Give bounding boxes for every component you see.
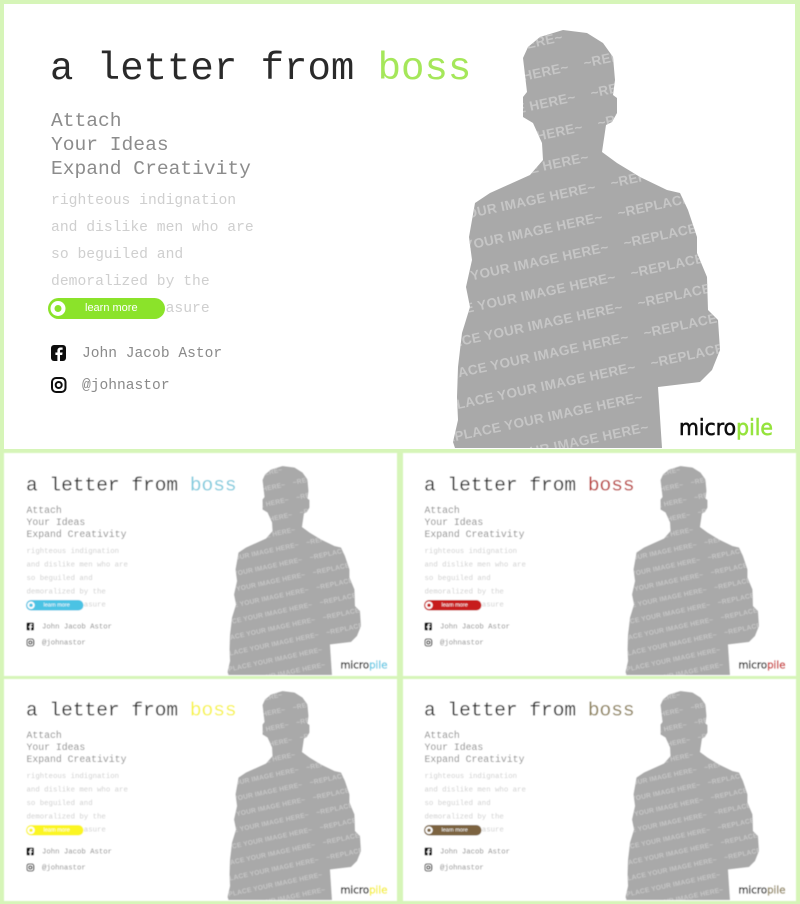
body text: demoralized by the — [424, 588, 504, 596]
button: learn more: learn more — [44, 828, 70, 834]
image placeholder silhouette: ~REPLACE YOUR IMAGE HERE~ — [309, 532, 418, 562]
body text: so beguiled and — [51, 247, 183, 263]
body text: righteous indignation — [424, 773, 517, 781]
image placeholder silhouette: ~REPLACE YOUR IMAGE HERE~ — [366, 119, 584, 180]
title: a letter from boss — [26, 474, 237, 496]
icon: facebook — [424, 622, 432, 630]
image placeholder silhouette: ~REPLACE YOUR IMAGE HERE~ — [585, 527, 694, 556]
subtitle: Your Ideas — [26, 517, 85, 528]
image placeholder silhouette: ~REPLACE YOUR IMAGE HERE~ — [609, 632, 718, 661]
button: learn more — [26, 825, 84, 836]
contact name: John Jacob Astor — [42, 848, 112, 856]
image placeholder silhouette: ~REPLACE YOUR IMAGE HERE~ — [319, 802, 428, 832]
image placeholder silhouette: ~REPLACE YOUR IMAGE HERE~ — [191, 767, 300, 796]
contact handle: @johnastor — [440, 640, 484, 648]
icon: facebook — [51, 345, 66, 361]
logo: micropile — [340, 658, 388, 672]
image placeholder silhouette: ~REPLACE YOUR IMAGE HERE~ — [619, 677, 728, 706]
image placeholder silhouette: ~REPLACE YOUR IMAGE HERE~ — [187, 752, 296, 781]
body text: and dislike men who are — [51, 220, 254, 236]
contact handle: @johnastor — [42, 640, 86, 648]
logo: micropile — [738, 884, 786, 896]
image placeholder silhouette: ~REPLACE YOUR IMAGE HERE~ — [694, 697, 800, 727]
image placeholder silhouette: ~REPLACE YOUR IMAGE HERE~ — [302, 727, 411, 757]
body text: so beguiled and — [26, 575, 93, 583]
image placeholder silhouette: ~REPLACE YOUR IMAGE HERE~ — [352, 59, 570, 120]
image placeholder silhouette: ~REPLACE YOUR IMAGE HERE~ — [181, 497, 290, 526]
image placeholder silhouette: ~REPLACE YOUR IMAGE HERE~ — [589, 767, 698, 796]
body text: demoralized by the — [26, 588, 106, 596]
icon: facebook — [424, 848, 432, 856]
subtitle: Expand Creativity — [424, 754, 525, 765]
image placeholder silhouette: ~REPLACE YOUR IMAGE HERE~ — [592, 557, 701, 586]
image placeholder silhouette: ~REPLACE YOUR IMAGE HERE~ — [346, 29, 564, 90]
image placeholder silhouette: ~REPLACE YOUR IMAGE HERE~ — [187, 527, 296, 556]
image placeholder silhouette: ~REPLACE YOUR IMAGE HERE~ — [439, 449, 657, 510]
body text: righteous indignation — [26, 773, 119, 781]
body text: charms of pleasure — [26, 826, 106, 834]
image placeholder silhouette: ~REPLACE YOUR IMAGE HERE~ — [299, 712, 408, 742]
image placeholder silhouette — [227, 466, 362, 676]
image placeholder silhouette: ~REPLACE YOUR IMAGE HERE~ — [386, 209, 604, 270]
image placeholder silhouette: ~REPLACE YOUR IMAGE HERE~ — [211, 857, 320, 886]
image placeholder silhouette — [453, 30, 720, 448]
image placeholder silhouette: ~REPLACE YOUR IMAGE HERE~ — [582, 10, 800, 71]
button: learn more: learn more — [442, 602, 468, 608]
image placeholder silhouette: ~REPLACE YOUR IMAGE HERE~ — [589, 542, 698, 571]
panel: brown slide — [403, 679, 800, 904]
image placeholder silhouette: ~REPLACE YOUR IMAGE HERE~ — [197, 572, 306, 601]
image placeholder silhouette: ~REPLACE YOUR IMAGE HERE~ — [177, 482, 286, 511]
subtitle: Attach — [26, 505, 62, 516]
image placeholder silhouette: ~REPLACE YOUR IMAGE HERE~ — [690, 682, 799, 712]
image placeholder silhouette: ~REPLACE YOUR IMAGE HERE~ — [582, 512, 691, 541]
image placeholder silhouette: ~REPLACE YOUR IMAGE HERE~ — [406, 299, 624, 360]
subtitle: Expand Creativity — [26, 754, 127, 765]
image placeholder silhouette: ~REPLACE YOUR IMAGE HERE~ — [399, 269, 617, 330]
body text: so beguiled and — [424, 575, 491, 583]
body text: charms of pleasure — [424, 826, 504, 834]
body text: and dislike men who are — [26, 786, 128, 794]
panel: red slide — [402, 452, 796, 676]
icon: instagram — [27, 864, 34, 871]
image placeholder silhouette: ~REPLACE YOUR IMAGE HERE~ — [201, 587, 310, 616]
image placeholder silhouette: ~REPLACE YOUR IMAGE HERE~ — [201, 812, 310, 841]
image placeholder silhouette: ~REPLACE YOUR IMAGE HERE~ — [211, 632, 320, 661]
image placeholder silhouette — [625, 466, 760, 676]
image placeholder silhouette: ~REPLACE YOUR IMAGE HERE~ — [174, 692, 283, 721]
body text: charms of pleasure — [424, 602, 504, 610]
icon: instagram — [425, 864, 432, 871]
image placeholder silhouette — [227, 690, 362, 900]
image placeholder silhouette: ~REPLACE YOUR IMAGE HERE~ — [184, 512, 293, 541]
image placeholder silhouette: ~REPLACE YOUR IMAGE HERE~ — [419, 359, 637, 420]
image placeholder silhouette: ~REPLACE YOUR IMAGE HERE~ — [572, 467, 681, 496]
image placeholder silhouette: ~REPLACE YOUR IMAGE HERE~ — [316, 787, 425, 817]
body text: charms of pleasure — [26, 602, 106, 610]
image placeholder silhouette: ~REPLACE YOUR IMAGE HERE~ — [292, 457, 401, 487]
body text: and dislike men who are — [424, 786, 526, 794]
image placeholder silhouette: ~REPLACE YOUR IMAGE HERE~ — [592, 782, 701, 811]
image placeholder silhouette: ~REPLACE YOUR IMAGE HERE~ — [359, 89, 577, 150]
image placeholder silhouette: ~REPLACE YOUR IMAGE HERE~ — [204, 602, 313, 631]
image placeholder silhouette: ~REPLACE YOUR IMAGE HERE~ — [174, 467, 283, 496]
image placeholder silhouette: ~REPLACE YOUR IMAGE HERE~ — [306, 742, 415, 772]
image placeholder silhouette: ~REPLACE YOUR IMAGE HERE~ — [612, 872, 721, 901]
image placeholder silhouette: ~REPLACE YOUR IMAGE HERE~ — [585, 752, 694, 781]
image placeholder silhouette: ~REPLACE YOUR IMAGE HERE~ — [694, 472, 800, 502]
image placeholder silhouette: ~REPLACE YOUR IMAGE HERE~ — [599, 812, 708, 841]
image placeholder silhouette: ~REPLACE YOUR IMAGE HERE~ — [426, 389, 644, 450]
body text: demoralized by the — [51, 274, 210, 290]
image placeholder silhouette: ~REPLACE YOUR IMAGE HERE~ — [690, 457, 799, 487]
image placeholder silhouette: ~REPLACE YOUR IMAGE HERE~ — [605, 842, 714, 871]
image placeholder silhouette: ~REPLACE YOUR IMAGE HERE~ — [207, 842, 316, 871]
image placeholder silhouette: ~REPLACE YOUR IMAGE HERE~ — [326, 607, 435, 637]
icon: instagram — [27, 639, 34, 646]
panel: large green slide — [4, 4, 795, 449]
title: a letter from boss — [26, 700, 237, 722]
image placeholder silhouette: ~REPLACE YOUR IMAGE HERE~ — [296, 472, 405, 502]
image placeholder silhouette: ~REPLACE YOUR IMAGE HERE~ — [207, 617, 316, 646]
title: a letter from boss — [424, 700, 635, 722]
image placeholder silhouette: ~REPLACE YOUR IMAGE HERE~ — [296, 697, 405, 727]
icon: facebook — [26, 622, 34, 630]
button: learn more — [424, 825, 482, 836]
contact name: John Jacob Astor — [82, 346, 222, 362]
subtitle: Attach — [424, 730, 460, 741]
panel: yellow slide — [4, 679, 435, 904]
title: a letter from boss — [50, 47, 471, 91]
body text: and dislike men who are — [424, 562, 526, 570]
image placeholder silhouette: ~REPLACE YOUR IMAGE HERE~ — [217, 662, 326, 691]
subtitle: Your Ideas — [424, 517, 483, 528]
image placeholder silhouette: ~REPLACE YOUR IMAGE HERE~ — [191, 542, 300, 571]
image placeholder silhouette: ~REPLACE YOUR IMAGE HERE~ — [599, 587, 708, 616]
icon: instagram — [52, 378, 66, 392]
image placeholder silhouette: ~REPLACE YOUR IMAGE HERE~ — [309, 757, 418, 787]
image placeholder silhouette: ~REPLACE YOUR IMAGE HERE~ — [615, 662, 724, 691]
image placeholder silhouette: ~REPLACE YOUR IMAGE HERE~ — [379, 179, 597, 240]
image placeholder silhouette: ~REPLACE YOUR IMAGE HERE~ — [306, 517, 415, 547]
subtitle: Expand Creativity — [51, 158, 251, 180]
image placeholder silhouette: ~REPLACE YOUR IMAGE HERE~ — [221, 677, 330, 706]
contact handle: @johnastor — [440, 864, 484, 872]
button: learn more — [48, 298, 165, 319]
contact name: John Jacob Astor — [440, 624, 510, 632]
image placeholder silhouette: ~REPLACE YOUR IMAGE HERE~ — [582, 737, 691, 766]
body text: and dislike men who are — [26, 562, 128, 570]
contact name: John Jacob Astor — [42, 624, 112, 632]
body text: so beguiled and — [424, 800, 491, 808]
image placeholder silhouette: ~REPLACE YOUR IMAGE HERE~ — [609, 857, 718, 886]
body text: so beguiled and — [26, 800, 93, 808]
body text: righteous indignation — [51, 193, 236, 209]
contact handle: @johnastor — [82, 378, 170, 394]
image placeholder silhouette: ~REPLACE YOUR IMAGE HERE~ — [299, 487, 408, 517]
contact handle: @johnastor — [42, 864, 86, 872]
contact name: John Jacob Astor — [440, 848, 510, 856]
image placeholder silhouette: ~REPLACE YOUR IMAGE HERE~ — [312, 547, 421, 577]
subtitle: Your Ideas — [51, 134, 169, 156]
image placeholder silhouette: ~REPLACE YOUR IMAGE HERE~ — [214, 647, 323, 676]
image placeholder silhouette: ~REPLACE YOUR IMAGE HERE~ — [575, 707, 684, 736]
icon: instagram — [425, 639, 432, 646]
image placeholder silhouette: ~REPLACE YOUR IMAGE HERE~ — [214, 872, 323, 901]
image placeholder silhouette: ~REPLACE YOUR IMAGE HERE~ — [204, 827, 313, 856]
logo: micropile — [738, 658, 786, 672]
image placeholder silhouette: ~REPLACE YOUR IMAGE HERE~ — [177, 707, 286, 736]
image placeholder silhouette: ~REPLACE YOUR IMAGE HERE~ — [595, 797, 704, 826]
image placeholder silhouette: ~REPLACE YOUR IMAGE HERE~ — [326, 832, 435, 862]
image placeholder silhouette: ~REPLACE YOUR IMAGE HERE~ — [612, 647, 721, 676]
button: learn more: learn more — [85, 302, 138, 314]
image placeholder silhouette: ~REPLACE YOUR IMAGE HERE~ — [579, 497, 688, 526]
body text: charms of pleasure — [51, 301, 210, 317]
image placeholder silhouette: ~REPLACE YOUR IMAGE HERE~ — [572, 692, 681, 721]
image placeholder silhouette: ~REPLACE YOUR IMAGE HERE~ — [322, 592, 431, 622]
image placeholder silhouette: ~REPLACE YOUR IMAGE HERE~ — [181, 722, 290, 751]
subtitle: Your Ideas — [424, 742, 483, 753]
image placeholder silhouette: ~REPLACE YOUR IMAGE HERE~ — [595, 572, 704, 601]
image placeholder silhouette: ~REPLACE YOUR IMAGE HERE~ — [302, 502, 411, 532]
body text: righteous indignation — [26, 548, 119, 556]
subtitle: Attach — [51, 110, 122, 132]
logo: micropile — [340, 884, 388, 896]
button: learn more — [26, 600, 84, 610]
body text: demoralized by the — [26, 814, 106, 822]
image placeholder silhouette: ~REPLACE YOUR IMAGE HERE~ — [392, 239, 610, 300]
image placeholder silhouette: ~REPLACE YOUR IMAGE HERE~ — [194, 557, 303, 586]
image placeholder silhouette: ~REPLACE YOUR IMAGE HERE~ — [194, 782, 303, 811]
button: learn more: learn more — [44, 602, 70, 608]
icon: facebook — [26, 848, 34, 856]
logo: micropile — [679, 416, 773, 441]
image placeholder silhouette: ~REPLACE YOUR IMAGE HERE~ — [579, 722, 688, 751]
image placeholder silhouette: ~REPLACE YOUR IMAGE HERE~ — [372, 149, 590, 210]
subtitle: Attach — [26, 730, 62, 741]
subtitle: Your Ideas — [26, 742, 85, 753]
button: learn more: learn more — [442, 828, 468, 834]
panel: blue slide — [4, 452, 398, 676]
image placeholder silhouette — [625, 690, 760, 900]
image placeholder silhouette: ~REPLACE YOUR IMAGE HERE~ — [322, 817, 431, 847]
subtitle: Attach — [424, 505, 460, 516]
image placeholder silhouette: ~REPLACE YOUR IMAGE HERE~ — [312, 772, 421, 802]
body text: demoralized by the — [424, 814, 504, 822]
image placeholder silhouette: ~REPLACE YOUR IMAGE HERE~ — [605, 617, 714, 646]
image placeholder silhouette: ~REPLACE YOUR IMAGE HERE~ — [575, 482, 684, 511]
image placeholder silhouette: ~REPLACE YOUR IMAGE HERE~ — [316, 562, 425, 592]
body text: righteous indignation — [424, 548, 517, 556]
image placeholder silhouette: ~REPLACE YOUR IMAGE HERE~ — [602, 827, 711, 856]
image placeholder silhouette: ~REPLACE YOUR IMAGE HERE~ — [432, 419, 650, 480]
image placeholder silhouette: ~REPLACE YOUR IMAGE HERE~ — [602, 602, 711, 631]
image placeholder silhouette: ~REPLACE YOUR IMAGE HERE~ — [184, 737, 293, 766]
image placeholder silhouette: ~REPLACE YOUR IMAGE HERE~ — [319, 577, 428, 607]
image placeholder silhouette: ~REPLACE YOUR IMAGE HERE~ — [197, 797, 306, 826]
title: a letter from boss — [424, 474, 635, 496]
subtitle: Expand Creativity — [424, 529, 525, 540]
image placeholder silhouette: ~REPLACE YOUR IMAGE HERE~ — [412, 329, 630, 390]
image placeholder silhouette: ~REPLACE YOUR IMAGE HERE~ — [292, 682, 401, 712]
button: learn more — [424, 600, 482, 610]
subtitle: Expand Creativity — [26, 529, 127, 540]
